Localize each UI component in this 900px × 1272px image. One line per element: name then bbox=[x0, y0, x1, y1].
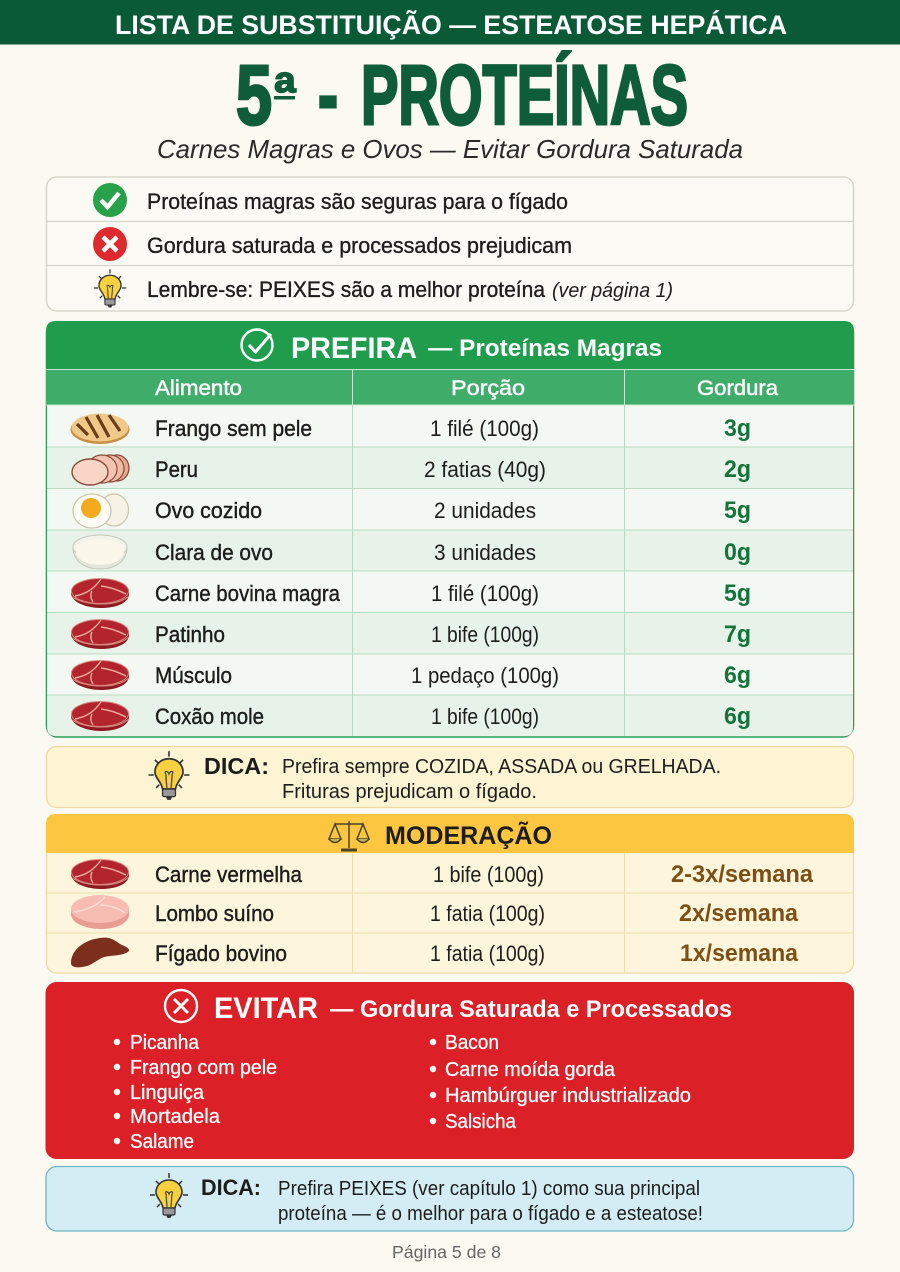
icon: raw beef bbox=[71, 578, 129, 608]
row: fígado bovino bbox=[71, 938, 799, 967]
evitar heading: EVITAR bbox=[214, 992, 318, 1025]
main title bbox=[236, 50, 687, 126]
header band bbox=[0, 0, 900, 44]
column headers: Gordura bbox=[697, 376, 778, 400]
list: right column bbox=[430, 1031, 691, 1133]
row: clara de ovo: 3 unidades bbox=[434, 540, 536, 565]
prefira heading: PREFIRA bbox=[291, 332, 417, 365]
row: músculo: Músculo bbox=[155, 663, 232, 688]
tip text bbox=[282, 756, 721, 803]
list: right column: Carne moída gorda bbox=[445, 1058, 616, 1081]
row: coxão mole: 1 bife (100g) bbox=[431, 704, 539, 729]
row: carne bovina magra: Carne bovina magra bbox=[155, 581, 341, 606]
key point: fish reminder: (ver página 1) bbox=[552, 280, 673, 302]
list: right column: Hambúrguer industrializado bbox=[445, 1084, 691, 1107]
row: frango bbox=[70, 414, 751, 444]
prefira subheading: — Proteínas Magras bbox=[428, 335, 662, 362]
column headers: Alimento bbox=[155, 376, 242, 400]
row: patinho: Patinho bbox=[155, 622, 225, 647]
header title: LISTA DE SUBSTITUIÇÃO — ESTEATOSE HEPÁTICA bbox=[115, 9, 787, 40]
row: peru: 2g bbox=[724, 456, 751, 483]
list: right column: Salsicha bbox=[445, 1110, 517, 1133]
row: patinho: 7g bbox=[724, 621, 751, 648]
icon: raw beef bbox=[71, 620, 129, 649]
icon: raw beef bbox=[71, 660, 129, 690]
row shading bbox=[47, 405, 853, 736]
tip text: Prefira PEIXES (ver capítulo 1) como sua principal bbox=[278, 1178, 700, 1200]
list: left column bbox=[114, 1031, 277, 1153]
row: ovo cozido bbox=[73, 494, 751, 528]
tip text: proteína — é o melhor para o fígado e a esteatose! bbox=[278, 1203, 703, 1225]
row: ovo cozido: 2 unidades bbox=[434, 498, 536, 523]
row: peru: 2 fatias (40g) bbox=[424, 457, 546, 482]
row: carne bovina magra: 5g bbox=[724, 580, 751, 607]
list: right column: Bacon bbox=[445, 1031, 499, 1054]
list: left column: Frango com pele bbox=[130, 1056, 277, 1079]
icon: light bulb bbox=[148, 751, 190, 800]
row: lombo suíno bbox=[71, 895, 799, 929]
row: frango: 1 filé (100g) bbox=[430, 416, 539, 441]
callout: fish tip bbox=[46, 1166, 854, 1231]
main title: ª bbox=[274, 61, 297, 126]
subtitle: Carnes Magras e Ovos — Evitar Gordura Saturada bbox=[157, 134, 743, 164]
row: fígado bovino: Fígado bovino bbox=[155, 941, 287, 966]
column headers bbox=[46, 369, 854, 405]
icon: pork loin bbox=[71, 895, 129, 929]
row: lombo suíno: 2x/semana bbox=[679, 900, 799, 927]
row: carne vermelha bbox=[71, 860, 814, 889]
key point: saturated fat: Gordura saturada e processados prejudicam bbox=[147, 233, 572, 258]
row: fígado bovino: 1x/semana bbox=[680, 940, 799, 967]
row: frango: 3g bbox=[724, 415, 751, 442]
icon: scales bbox=[329, 821, 369, 850]
icon: grilled chicken bbox=[70, 414, 130, 444]
panel: moderação bbox=[46, 814, 854, 973]
row: frango: Frango sem pele bbox=[155, 416, 312, 441]
icon: red cross bbox=[93, 227, 127, 261]
page number: Página 5 de 8 bbox=[392, 1242, 501, 1262]
row: ovo cozido: 5g bbox=[724, 497, 751, 524]
row: carne vermelha: 2-3x/semana bbox=[671, 861, 814, 888]
tip text bbox=[278, 1178, 703, 1225]
row: carne vermelha: 1 bife (100g) bbox=[433, 862, 544, 887]
row: músculo: 6g bbox=[724, 662, 751, 689]
main title: PROTEÍNAS bbox=[361, 48, 688, 142]
row: ovo cozido: Ovo cozido bbox=[155, 498, 262, 523]
panel: evitar bbox=[46, 982, 854, 1159]
icon: red meat bbox=[71, 860, 129, 889]
row: músculo bbox=[71, 660, 751, 690]
row: carne bovina magra: 1 filé (100g) bbox=[431, 581, 539, 606]
icon: boiled egg bbox=[73, 494, 128, 528]
row: peru: Peru bbox=[155, 457, 198, 482]
row: coxão mole: Coxão mole bbox=[155, 704, 264, 729]
icon: light bulb bbox=[94, 269, 126, 308]
grid lines bbox=[46, 853, 854, 973]
row: clara de ovo: 0g bbox=[724, 539, 751, 566]
row: coxão mole: 6g bbox=[724, 703, 751, 730]
list: left column: Linguiça bbox=[130, 1081, 205, 1104]
moderação header bbox=[46, 814, 854, 853]
callout: cooking tip bbox=[46, 746, 854, 808]
row: fígado bovino: 1 fatia (100g) bbox=[430, 941, 545, 966]
row: clara de ovo bbox=[73, 535, 751, 569]
icon: light bulb bbox=[150, 1173, 188, 1218]
row: lombo suíno: 1 fatia (100g) bbox=[430, 901, 545, 926]
list: left column: Mortadela bbox=[130, 1105, 221, 1128]
main title: 5 bbox=[236, 48, 272, 142]
panel: prefira bbox=[46, 321, 854, 737]
icon: liver bbox=[71, 938, 129, 967]
tip label: DICA: bbox=[201, 1175, 261, 1200]
row: carne vermelha: Carne vermelha bbox=[155, 862, 303, 887]
tip label: DICA: bbox=[204, 753, 269, 779]
row: peru bbox=[72, 455, 751, 485]
icon: green check bbox=[93, 183, 127, 217]
icon: raw beef bbox=[71, 702, 129, 731]
list: left column: Salame bbox=[130, 1130, 194, 1153]
row: coxão mole bbox=[71, 702, 751, 731]
moderação heading: MODERAÇÃO bbox=[385, 820, 552, 850]
row: carne bovina magra bbox=[71, 578, 751, 608]
tip text: Prefira sempre COZIDA, ASSADA ou GRELHADA. bbox=[282, 756, 721, 778]
column headers: Porção bbox=[451, 376, 525, 400]
tip text: Frituras prejudicam o fígado. bbox=[282, 781, 537, 803]
icon: sliced turkey bbox=[72, 455, 129, 485]
row: patinho bbox=[71, 620, 751, 649]
icon: outline check bbox=[242, 330, 272, 360]
row: lombo suíno: Lombo suíno bbox=[155, 901, 274, 926]
list: left column: Picanha bbox=[130, 1031, 200, 1054]
row: clara de ovo: Clara de ovo bbox=[155, 540, 273, 565]
evitar subheading: — Gordura Saturada e Processados bbox=[330, 996, 732, 1023]
panel: key points bbox=[46, 177, 854, 311]
row: patinho: 1 bife (100g) bbox=[431, 622, 539, 647]
icon: outline cross bbox=[165, 990, 197, 1022]
icon: bowl of egg white bbox=[73, 535, 127, 569]
key point: lean proteins: Proteínas magras são seguras para o fígado bbox=[147, 189, 568, 214]
main title: - bbox=[318, 48, 338, 142]
key point: fish reminder: Lembre-se: PEIXES são a melhor proteína bbox=[147, 277, 546, 302]
prefira header bbox=[46, 321, 854, 369]
row: músculo: 1 pedaço (100g) bbox=[411, 663, 559, 688]
